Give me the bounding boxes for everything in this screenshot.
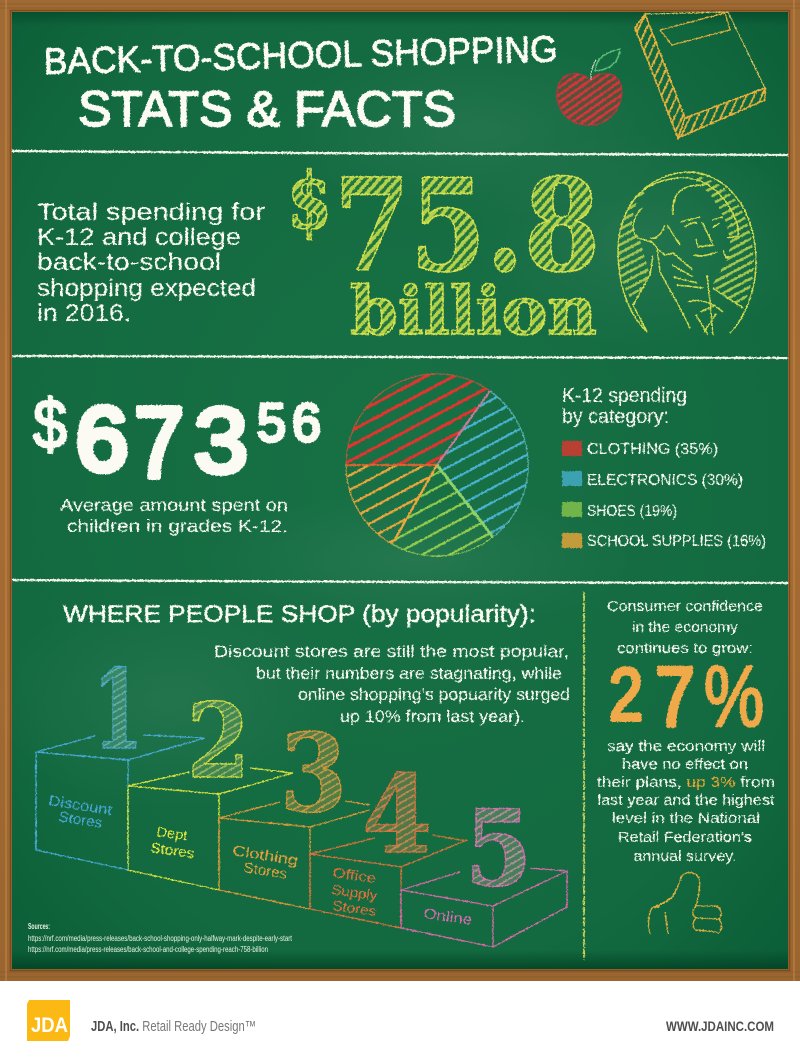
big number: $673.56: $	[33, 385, 67, 463]
podium step 1: discount stores: 1	[93, 645, 143, 774]
title: BACK-TO-SCHOOL SHOPPING	[43, 28, 558, 82]
podium step 3: clothing stores	[219, 711, 370, 909]
legend item: shoes	[562, 502, 677, 520]
legend item: electronics: ELECTRONICS (30%)	[587, 472, 743, 489]
icon: apple	[557, 49, 622, 125]
slice: school supplies 16%	[346, 465, 437, 544]
big number: 27%	[609, 649, 764, 745]
text: economy survey: level in the National	[612, 811, 760, 827]
text: total spending: Total spending for	[37, 199, 265, 226]
legend: by category:	[562, 406, 669, 428]
slice: clothing 35%	[346, 374, 490, 465]
legend: K-12 spending	[562, 385, 687, 407]
podium step 1: discount stores: Discount	[47, 793, 113, 819]
text: economy survey	[597, 739, 775, 865]
text: economy survey: have no effect on	[622, 757, 748, 773]
sources: Sources:	[28, 922, 50, 931]
podium step 4: office supply stores: Stores	[332, 897, 377, 919]
text: economy survey: Retail Federation's	[618, 830, 752, 846]
podium step 5: online	[401, 786, 567, 947]
text: discount stores paragraph	[214, 643, 570, 726]
big number: 27%: 7	[655, 650, 695, 744]
big number: $75.8 billion: 75.8	[334, 151, 600, 300]
text: average amount: Average amount spent on	[60, 495, 288, 515]
podium step 3: clothing stores: 3	[280, 711, 347, 837]
podium step 5: online: Online	[422, 906, 473, 929]
text: total spending: in 2016.	[37, 300, 131, 327]
podium step 4: office supply stores: 4	[362, 752, 432, 878]
sources: https://nrf.com/media/press-releases/back-school-and-college-spending-reach-758-billion	[28, 945, 268, 954]
company name: JDA, Inc. Retail Ready Design™	[91, 1019, 256, 1035]
big number: $75.8 billion	[287, 151, 600, 350]
text: average amount	[60, 495, 288, 536]
big number: $75.8 billion: $	[287, 156, 332, 247]
legend	[562, 385, 766, 550]
podium step 1: discount stores: Stores	[57, 809, 103, 832]
sources: https://nrf.com/media/press-releases/back-school-shopping-only-halfway-mark-despite-early-start	[28, 934, 293, 943]
title	[43, 28, 558, 137]
big number: $673.56: 6	[292, 393, 321, 453]
logo: JDA: JDA	[31, 1014, 68, 1037]
podium step 1: discount stores	[36, 645, 205, 870]
text: total spending: back-to-school	[37, 249, 221, 276]
text: economy survey: last year and the highest	[598, 793, 774, 809]
text: economy survey: annual survey.	[634, 849, 736, 865]
slice: electronics 30%	[437, 391, 528, 537]
legend item: shoes: SHOES (19%)	[587, 503, 677, 520]
big number: $75.8 billion: billion	[350, 272, 597, 350]
podium step 2: dept stores	[128, 681, 293, 890]
big number: $673.56	[33, 385, 321, 499]
podium step 4: office supply stores	[310, 752, 467, 928]
text: total spending: K-12 and college	[37, 224, 241, 251]
dividers	[12, 151, 788, 960]
text: consumer confidence: in the economy	[632, 620, 739, 636]
sources	[28, 922, 293, 954]
text: consumer confidence: Consumer confidence	[607, 599, 763, 615]
podium step 5: online: 5	[465, 786, 532, 910]
icon: book	[635, 12, 765, 138]
podium step 3: clothing stores: Clothing	[231, 843, 299, 869]
text: economy survey: their plans, up 3% from	[597, 775, 775, 791]
big number: $673.56: 6	[76, 390, 128, 490]
text: consumer confidence	[607, 599, 763, 657]
text: discount stores paragraph: up 10% from last year).	[340, 708, 525, 726]
podium step 4: office supply stores: Office	[332, 864, 378, 886]
big number: 27%: %	[704, 649, 764, 745]
podium step 2: dept stores: Dept	[156, 823, 189, 843]
text: economy survey: say the economy will	[607, 739, 765, 755]
icon: thumbs up	[649, 872, 722, 934]
heading: where people shop: WHERE PEOPLE SHOP (by popularity):	[63, 601, 536, 628]
podium step 3: clothing stores: Stores	[242, 860, 288, 883]
podium step 4: office supply stores: Supply	[331, 881, 378, 903]
title: STATS & FACTS	[78, 81, 456, 137]
legend item: school supplies: SCHOOL SUPPLIES (16%)	[587, 533, 766, 550]
text: discount stores paragraph: online shopping's popuarity surged	[298, 686, 570, 704]
slice: shoes 19%	[392, 465, 493, 556]
podium step 2: dept stores: Stores	[150, 839, 195, 861]
big number: $673.56: 5	[257, 393, 286, 453]
text: discount stores paragraph: Discount stores are still the most popular,	[214, 643, 569, 661]
text: average amount: children in grades K-12.	[67, 516, 288, 536]
website: WWW.JDAINC.COM	[666, 1018, 774, 1034]
legend item: clothing: CLOTHING (35%)	[587, 441, 718, 458]
logo: JDA	[27, 1000, 70, 1041]
footer	[0, 981, 800, 1057]
big number: 27%: 2	[609, 653, 643, 736]
text: consumer confidence: continues to grow:	[617, 641, 753, 657]
text: total spending	[37, 199, 265, 327]
big number: $673.56: 3	[194, 390, 248, 492]
pie chart	[346, 374, 528, 556]
podium step 2: dept stores: 2	[187, 681, 250, 802]
text: total spending: shopping expected	[37, 275, 256, 302]
text: discount stores paragraph: but their numbers are stagnating, while	[256, 665, 562, 683]
big number: $673.56: 7	[134, 387, 184, 499]
icon: George Washington portrait	[618, 172, 756, 335]
